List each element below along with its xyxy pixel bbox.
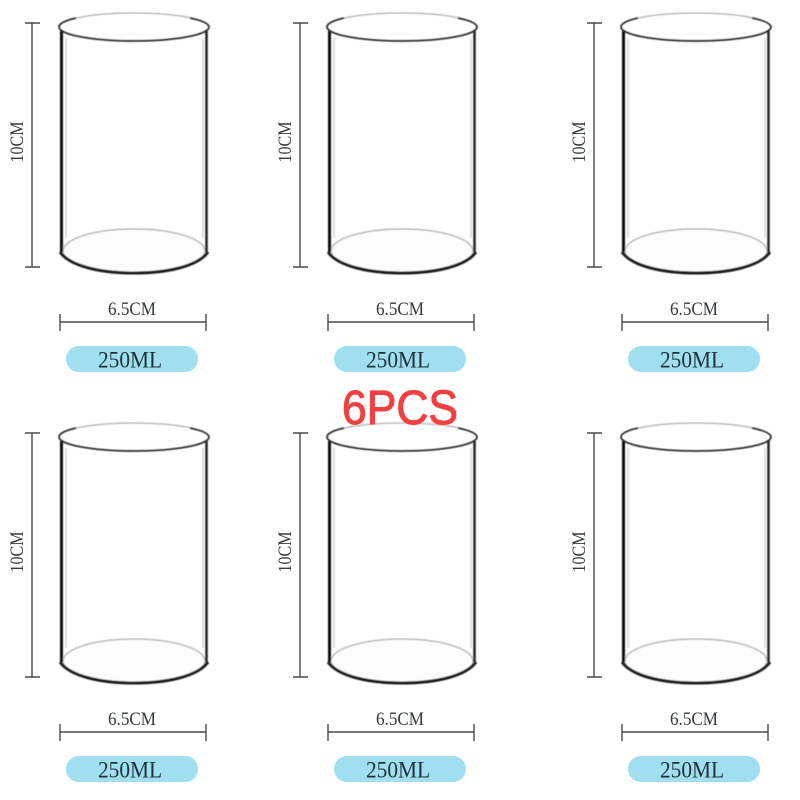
capacity pill: 250ML [366, 758, 430, 782]
height dimension: 10CM [275, 531, 296, 572]
width dimension: 6.5CM [376, 299, 424, 320]
width dimension [60, 709, 206, 741]
icon: glass cylinder [327, 423, 477, 683]
width dimension: 6.5CM [670, 709, 718, 730]
height dimension [275, 23, 308, 267]
width dimension [622, 299, 768, 331]
capacity pill: 250ML [660, 348, 724, 372]
icon: glass cylinder [621, 423, 771, 683]
capacity pill [334, 346, 466, 372]
width dimension [328, 709, 474, 741]
width dimension: 6.5CM [376, 709, 424, 730]
width dimension: 6.5CM [108, 299, 156, 320]
height dimension [7, 23, 40, 267]
capacity pill [66, 346, 198, 372]
product unit 3: glass top right [569, 13, 771, 372]
height dimension [275, 433, 308, 677]
capacity pill [628, 756, 760, 782]
width dimension [60, 299, 206, 331]
capacity pill: 250ML [98, 758, 162, 782]
product unit 4: glass bottom left [7, 423, 209, 782]
icon: glass cylinder [327, 13, 477, 273]
icon: glass cylinder [621, 13, 771, 273]
height dimension: 10CM [569, 121, 590, 162]
height dimension: 10CM [275, 121, 296, 162]
width dimension: 6.5CM [670, 299, 718, 320]
icon: glass cylinder [59, 423, 209, 683]
product unit 2: glass top centre [275, 13, 477, 372]
height dimension [569, 433, 602, 677]
capacity pill [628, 346, 760, 372]
height dimension [569, 23, 602, 267]
capacity pill: 250ML [660, 758, 724, 782]
capacity pill: 250ML [98, 348, 162, 372]
capacity pill: 250ML [366, 348, 430, 372]
height dimension: 10CM [7, 531, 28, 572]
height dimension: 10CM [7, 121, 28, 162]
product unit 1: glass top left [7, 13, 209, 372]
width dimension [622, 709, 768, 741]
capacity pill [334, 756, 466, 782]
product unit 6: glass bottom right [569, 423, 771, 782]
icon: glass cylinder [59, 13, 209, 273]
product unit 5: glass bottom centre [275, 423, 477, 782]
title: 6PCS quantity: 6PCS [342, 382, 458, 435]
capacity pill [66, 756, 198, 782]
height dimension: 10CM [569, 531, 590, 572]
width dimension [328, 299, 474, 331]
height dimension [7, 433, 40, 677]
width dimension: 6.5CM [108, 709, 156, 730]
